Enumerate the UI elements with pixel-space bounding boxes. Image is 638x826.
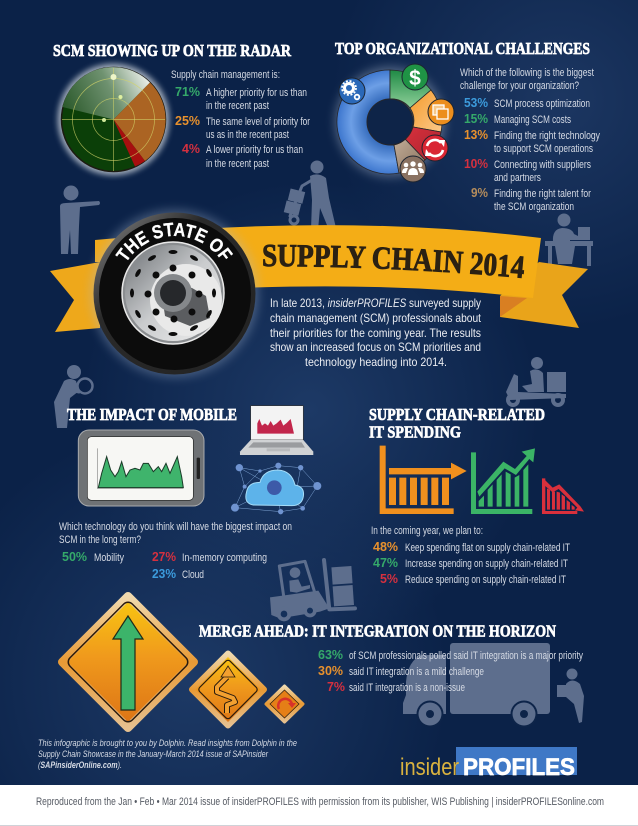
stat: 10 percent: and partners (494, 172, 541, 184)
stat: 10 percent: 10% (464, 156, 488, 171)
stat: 53 percent: 53% (464, 95, 488, 110)
stat: 9 percent: the SCM organization (494, 201, 574, 213)
illustration: laptop with red chart (240, 406, 313, 455)
icon: refresh arrows (422, 135, 448, 161)
icon: worker with magnifier (54, 365, 92, 428)
stat: 13 percent (464, 127, 600, 155)
stat: 71 percent: A higher priority for us than (206, 87, 307, 99)
text: introduction paragraph: In late 2013, insiderPROFILES surveyed supply (270, 296, 481, 310)
icon: dollar (402, 64, 428, 90)
icon: worker at desk (545, 214, 593, 266)
icon: worker with hand truck (284, 160, 336, 230)
stat: 50 percent: 50% (62, 549, 87, 564)
stat: 71 percent (175, 84, 307, 112)
text: introduction paragraph: show an increased focus on SCM priorities and (270, 340, 481, 354)
stat: 48 percent (373, 539, 570, 554)
panel: the impact of mobile (59, 405, 321, 581)
banner: ribbon (50, 225, 588, 332)
stat: 30 percent: 30% (318, 663, 343, 678)
stat: 13 percent: Finding the right technology (494, 130, 600, 142)
text: sponsor credit (38, 738, 297, 771)
text: sponsor credit: This infographic is brought to you by Dolphin. Read insights from Dolphin in the (38, 738, 297, 749)
stat: 15 percent (464, 111, 571, 126)
stat: 27 percent: In-memory computing (182, 552, 267, 564)
stat: 23 percent: Cloud (182, 569, 204, 581)
text: the state of: THE STATE OF (115, 222, 233, 260)
stat: 4 percent: A lower priority for us than (206, 144, 303, 156)
stat: 5 percent: Reduce spending on supply chain-related IT (405, 574, 566, 586)
text: introduction paragraph (270, 296, 482, 369)
icon: winding road sign (192, 654, 264, 726)
stat: 10 percent: Connecting with suppliers (494, 159, 591, 171)
icon: people (400, 156, 426, 182)
heading: THE IMPACT OF MOBILE (67, 405, 237, 424)
text: sponsor credit: Supply Chain Showcase in the January-March 2014 issue of SAPinsider (38, 749, 269, 760)
stat: 9 percent: Finding the right talent for (494, 188, 591, 200)
stat: 63 percent: 63% (318, 647, 343, 662)
panel: top organizational challenges (335, 39, 600, 213)
wheel rim (122, 242, 224, 344)
text: question: SCM in the long term? (59, 534, 141, 546)
logo: insiderPROFILES: PROFILES (463, 754, 575, 781)
footer: reproduction notice (0, 785, 638, 826)
text: intro: Supply chain management is: (171, 69, 280, 81)
stat: 25 percent: us as in the recent past (206, 129, 289, 141)
text: question: challenge for your organization? (460, 80, 579, 92)
heading (369, 405, 545, 442)
stat: 7 percent: 7% (327, 679, 345, 694)
stat: 4 percent (182, 141, 303, 170)
icon: forklift (270, 560, 355, 621)
chart: radar pie (58, 64, 170, 176)
stat: 7 percent (327, 679, 465, 694)
stat: 25 percent: The same level of priority for (206, 116, 310, 128)
heading: TOP ORGANIZATIONAL CHALLENGES (335, 39, 590, 58)
text: sponsor credit: (SAPinsiderOnline.com). (38, 760, 122, 771)
icon: large merge sign (62, 596, 194, 728)
stat: 27 percent: 27% (152, 549, 176, 564)
icon: dollar: $ (409, 67, 421, 90)
chart: flat orange bars (380, 446, 467, 514)
stat: 30 percent: said IT integration is a mild challenge (349, 666, 484, 678)
stat: 50 percent: Mobility (94, 552, 124, 564)
stat: 13 percent: 13% (464, 127, 488, 142)
stat: 9 percent (471, 185, 591, 213)
heading: SUPPLY CHAIN-RELATED (369, 405, 545, 424)
text: intro: In the coming year, we plan to: (371, 525, 483, 537)
stat: 5 percent: 5% (380, 571, 398, 586)
stat: 53 percent: SCM process optimization (494, 98, 590, 110)
title: supply chain 2014: SUPPLY CHAIN 2014 (263, 244, 524, 278)
stat: 47 percent: 47% (373, 555, 398, 570)
icon: delivery truck with worker (403, 643, 584, 728)
stat: 50 percent (62, 549, 124, 564)
text: introduction paragraph: chain management (SCM) professionals about (270, 311, 482, 325)
stat: 7 percent: said IT integration is a non-issue (349, 682, 465, 694)
panel: merge ahead (62, 596, 583, 728)
icon: u-turn sign (266, 686, 303, 722)
chart: falling red bars (542, 478, 584, 514)
stat: 4 percent: 4% (182, 141, 200, 156)
illustration: cloud network (231, 463, 321, 514)
stat: 13 percent: to support SCM operations (494, 143, 593, 155)
stat: 10 percent (464, 156, 591, 184)
stat: 63 percent (318, 647, 583, 662)
heading: MERGE AHEAD: IT INTEGRATION ON THE HORIZON (199, 622, 556, 640)
stat: 25 percent: 25% (175, 113, 200, 128)
icon: pointing worker (60, 186, 100, 254)
stat: 25 percent (175, 113, 310, 141)
stat: 9 percent: 9% (471, 185, 488, 200)
text: introduction paragraph: technology heading into 2014. (305, 355, 447, 369)
stat: 47 percent (373, 555, 568, 570)
stat: 15 percent: Managing SCM costs (494, 114, 571, 126)
stat: 23 percent: 23% (152, 566, 176, 581)
badge: tire with the state of (86, 205, 264, 382)
stat: 15 percent: 15% (464, 111, 488, 126)
stat: 4 percent: in the recent past (206, 158, 269, 170)
stat: 53 percent (464, 95, 590, 110)
stat: 5 percent (380, 571, 566, 586)
stat: 48 percent: Keep spending flat on supply chain-related IT (405, 542, 570, 554)
logo: insiderPROFILES: insider (400, 754, 459, 781)
text: question (460, 67, 594, 92)
stat: 47 percent: Increase spending on supply chain-related IT (405, 558, 568, 570)
stat: 30 percent (318, 663, 484, 678)
heading: IT SPENDING (369, 422, 461, 442)
stat: 48 percent: 48% (373, 539, 398, 554)
stat: 27 percent (152, 549, 267, 564)
chart: rising green bars (471, 448, 535, 514)
panel: it spending (369, 405, 584, 586)
text: question (59, 521, 292, 546)
logo: insiderPROFILES (400, 747, 577, 781)
text: introduction paragraph: their priorities for the coming year. The results (270, 326, 481, 340)
panel: SCM on the radar (53, 41, 310, 176)
stat: 23 percent (152, 566, 204, 581)
icon: windows (428, 99, 454, 125)
heading: SCM SHOWING UP ON THE RADAR (53, 41, 292, 60)
text: question: Which of the following is the biggest (460, 67, 594, 79)
stat: 71 percent: in the recent past (206, 100, 269, 112)
stat: 71 percent: 71% (175, 84, 200, 99)
icon: delivery scooter (506, 357, 566, 405)
chart: donut (335, 67, 445, 177)
illustration: phone with green chart (78, 430, 204, 506)
text: question: Which technology do you think will have the biggest impact on (59, 521, 292, 533)
icon: gears (339, 78, 365, 104)
